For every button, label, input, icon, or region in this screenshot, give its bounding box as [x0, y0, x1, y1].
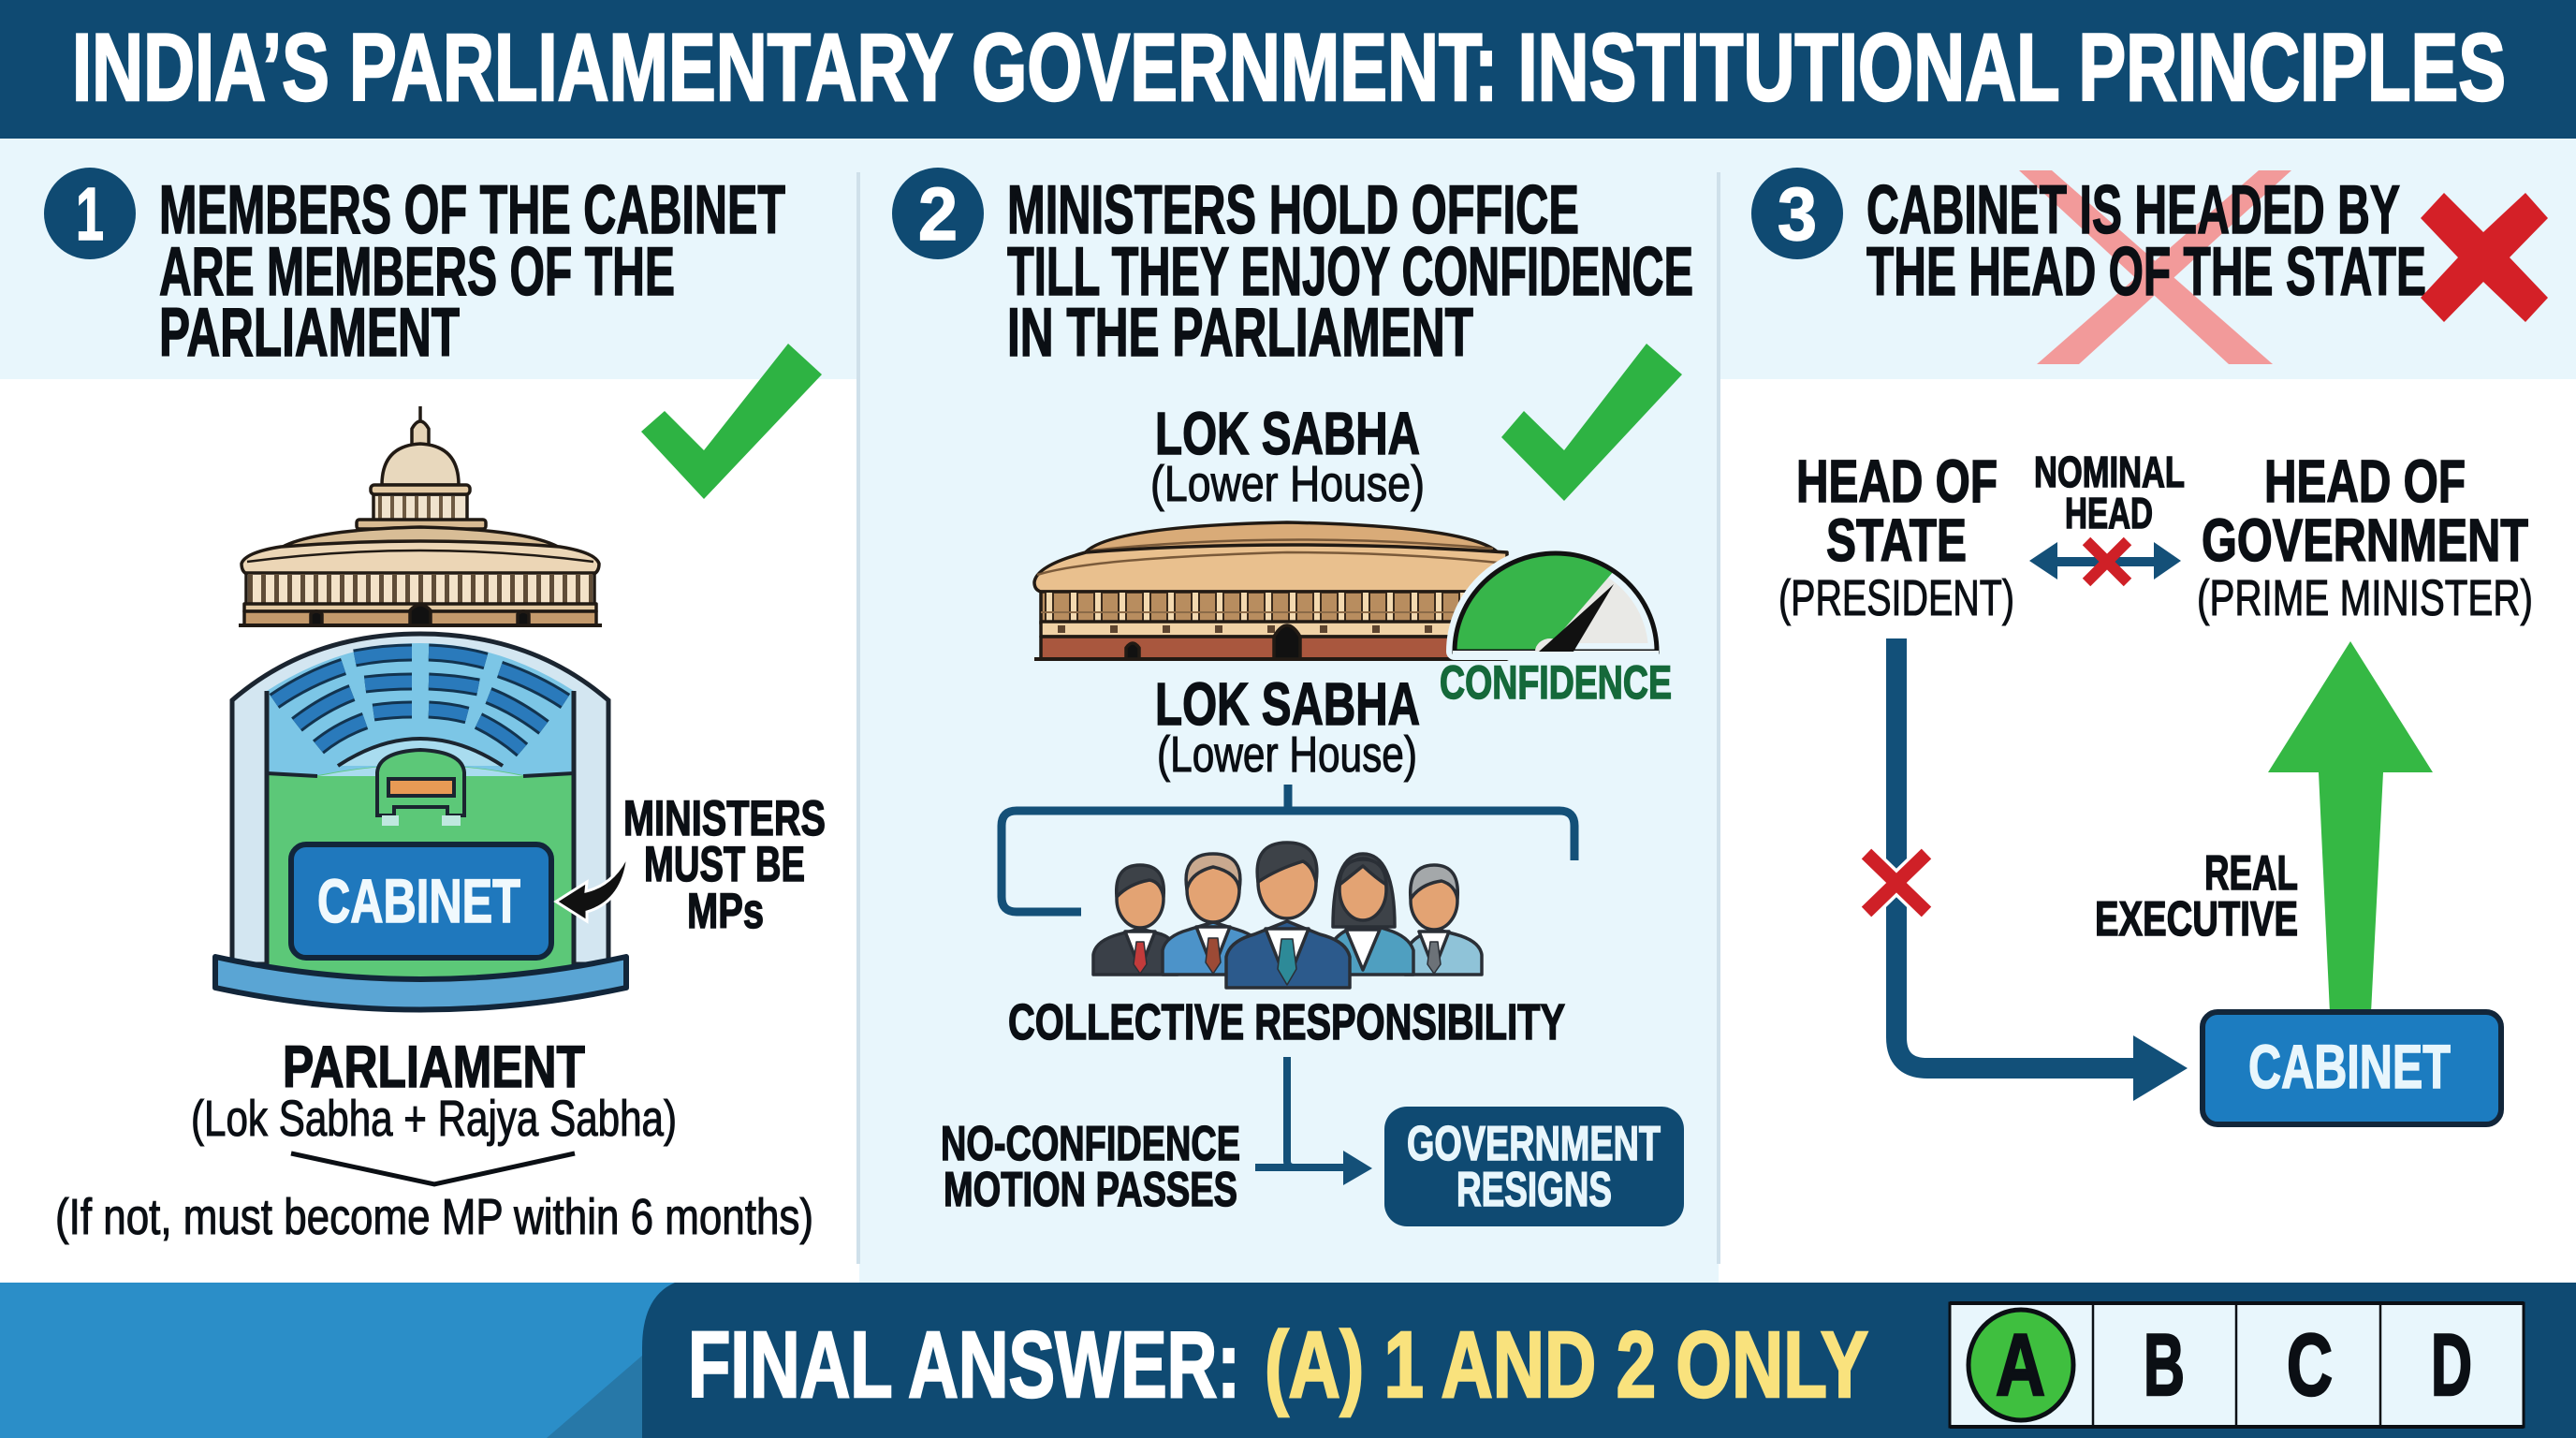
box: cabinet: CABINET [2248, 1032, 2451, 1101]
label: nominal head [2034, 448, 2185, 537]
label: head of state: (PRESIDENT) [1778, 570, 2014, 626]
label: head of government: HEAD OF [2264, 448, 2466, 515]
final answer text: FINAL ANSWER: [688, 1313, 1240, 1417]
speaker's podium [377, 750, 464, 815]
number badge 2 [892, 168, 984, 259]
label: nominal head: NOMINAL [2034, 448, 2185, 496]
final answer text: (A) 1 AND 2 ONLY [1265, 1313, 1868, 1417]
label: ministers must be MPs: MINISTERS [623, 791, 826, 846]
label: real executive: REAL [2204, 846, 2298, 901]
label: head of government [2197, 448, 2533, 626]
panel: statement 3 heading strip [1719, 139, 2576, 379]
answer options table [1950, 1303, 2524, 1427]
number badge 2: 2 [918, 172, 958, 256]
number badge 1 [44, 168, 136, 259]
icon: confidence gauge [1453, 553, 1659, 653]
seating tiers [274, 653, 565, 750]
number badge 1: 1 [76, 172, 104, 256]
arrow: green cabinet to prime minister [2268, 641, 2433, 1013]
heading 2: MINISTERS HOLD OFFICE [1007, 172, 1579, 248]
icon: red cross [2421, 193, 2548, 322]
label: confidence: CONFIDENCE [1440, 656, 1672, 709]
heading 1 [159, 172, 785, 371]
panel 3: cabinet head statement is false [1751, 168, 2548, 1124]
box: government resigns: GOVERNMENT [1407, 1117, 1661, 1171]
person 5 [1405, 865, 1482, 975]
big faded cross behind heading [2019, 170, 2291, 364]
label: real executive: EXECUTIVE [2095, 892, 2298, 946]
number badge 3: 3 [1778, 172, 1817, 256]
person 3 front [1226, 843, 1350, 988]
arrow: president to cabinet, blocked [1866, 638, 2188, 1101]
person 4 [1328, 854, 1413, 975]
label: head of state [1778, 448, 2014, 626]
cabinet box: CABINET [317, 866, 520, 935]
heading 2: IN THE PARLIAMENT [1007, 295, 1473, 371]
panel 2: ministers hold office on confidence [892, 168, 1693, 1226]
box: government resigns: RESIGNS [1456, 1163, 1612, 1217]
caption: parliament: (Lok Sabha + Rajya Sabha) [191, 1091, 677, 1147]
heading 1: PARLIAMENT [159, 295, 460, 371]
person 1 [1093, 865, 1178, 975]
label: ministers must be MPs [623, 791, 826, 939]
icon: group of ministers [1093, 843, 1482, 988]
final answer text [688, 1313, 1868, 1417]
caption: parliament [55, 1034, 813, 1245]
icon: green check 2 [1501, 344, 1682, 501]
caption: parliament: (If not, must become MP within 6 months) [55, 1189, 813, 1245]
label: ministers must be MPs: MUST BE [644, 837, 805, 892]
label: Lok Sabha top [1150, 400, 1425, 512]
heading 1: MEMBERS OF THE CABINET [159, 172, 785, 248]
caption: parliament: PARLIAMENT [283, 1034, 585, 1100]
number badge 3 [1751, 168, 1843, 259]
heading 3 [1866, 172, 2426, 310]
box: cabinet [2203, 1012, 2501, 1124]
label: real executive [2095, 846, 2298, 946]
option D: D [2431, 1315, 2472, 1414]
panel: statement 2 background [859, 139, 1719, 1283]
heading 2 [1007, 172, 1693, 371]
panel: statement 1 heading strip [0, 139, 859, 379]
label: Lok Sabha lower [1155, 670, 1420, 783]
label: no-confidence motion: NO-CONFIDENCE [941, 1117, 1240, 1171]
label: Lok Sabha top: (Lower House) [1150, 456, 1425, 512]
footer band: final answer [0, 1283, 2576, 1438]
arrow: blocked double arrow [2029, 541, 2181, 582]
option C: C [2287, 1315, 2333, 1414]
label: collective responsibility: COLLECTIVE RESPONSIBILITY [1008, 994, 1565, 1050]
heading 2: TILL THEY ENJOY CONFIDENCE [1007, 234, 1693, 310]
option A highlighted: A [1996, 1315, 2045, 1414]
icon: Lok Sabha building [1034, 522, 1507, 659]
option A highlighted [1969, 1310, 2073, 1420]
arrow: to government resigns [1255, 1057, 1372, 1185]
box: government resigns [1384, 1107, 1684, 1226]
label: Lok Sabha lower: (Lower House) [1157, 726, 1417, 783]
cabinet box [291, 844, 551, 958]
label: head of state: STATE [1826, 506, 1967, 574]
label: Lok Sabha top: LOK SABHA [1155, 400, 1420, 467]
option B: B [2144, 1315, 2185, 1414]
person 2 [1163, 854, 1264, 975]
arrow: ministers to cabinet [556, 854, 628, 921]
label: nominal head: HEAD [2065, 489, 2153, 537]
icon: green check 1 [641, 344, 822, 499]
label: no-confidence motion [941, 1117, 1240, 1217]
label: no-confidence motion: MOTION PASSES [944, 1163, 1237, 1217]
heading 1: ARE MEMBERS OF THE [159, 234, 675, 310]
diagram: parliament chamber [215, 634, 626, 1009]
icon: parliament dome building [239, 406, 602, 625]
label: Lok Sabha lower: LOK SABHA [1155, 670, 1420, 738]
bracket connector [1002, 785, 1574, 912]
label: ministers must be MPs: MPs [687, 884, 764, 939]
panel 1: cabinet members are MPs [44, 168, 826, 1245]
label: head of state: HEAD OF [1796, 448, 1998, 515]
